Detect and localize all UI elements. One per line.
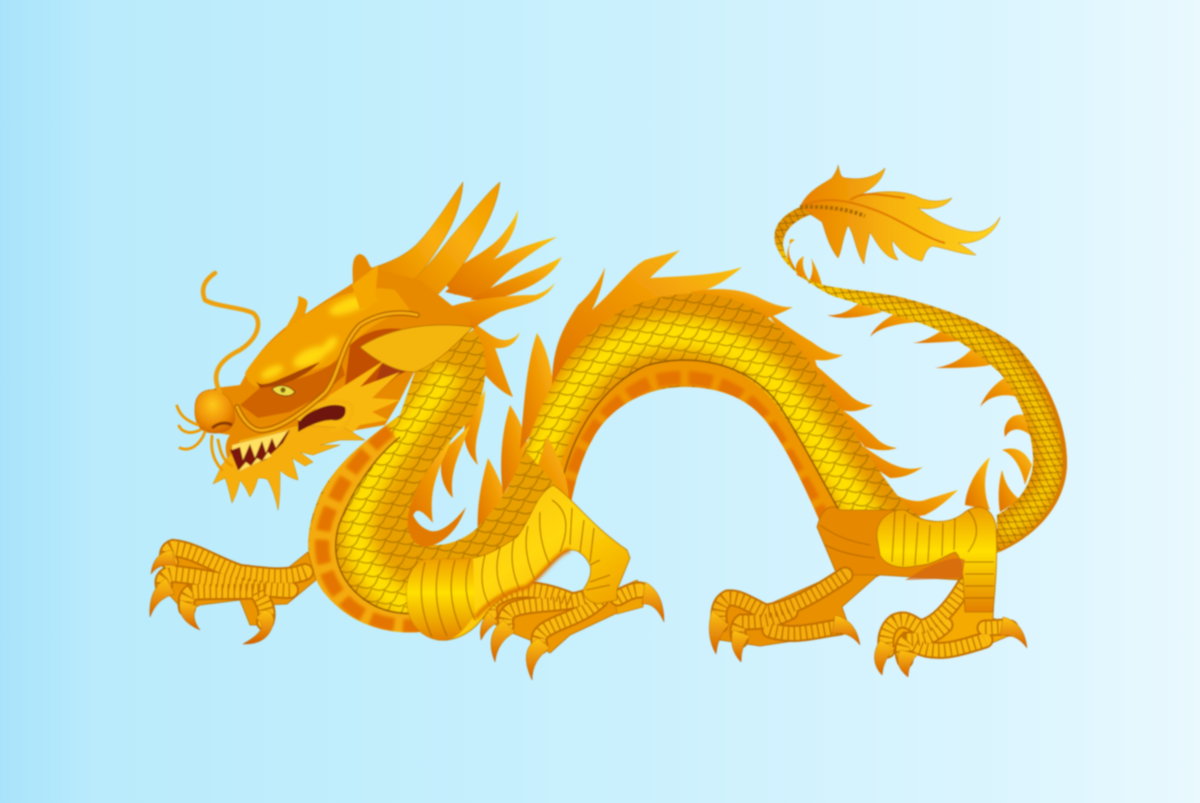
ribbed thigh [407, 485, 630, 640]
face shadow [240, 358, 345, 418]
neck [307, 329, 486, 634]
hind legs [709, 507, 1027, 677]
tail plume [800, 165, 1000, 264]
teeth [232, 430, 290, 472]
tail fins [787, 239, 1035, 512]
flame over body behind thigh [522, 435, 569, 515]
belly bands [560, 358, 839, 520]
eye [272, 386, 295, 396]
dragon [150, 165, 1080, 680]
neck belly bands [322, 430, 425, 626]
head base [195, 254, 470, 472]
snout highlights [259, 291, 373, 382]
hind-right claws [874, 617, 1027, 677]
claws [480, 582, 664, 680]
long whisker [203, 273, 258, 392]
lower coil behind the thigh [405, 450, 560, 600]
thigh shadow [475, 550, 570, 618]
mouth [230, 430, 290, 470]
right toe [614, 580, 645, 614]
palm [480, 590, 617, 653]
nose [195, 390, 235, 433]
neck mane flames [405, 322, 520, 547]
nose whiskers [177, 406, 232, 470]
upper hip [877, 507, 997, 612]
head top highlight [245, 288, 410, 387]
lip ridge [237, 313, 417, 430]
cheek mouth slit [298, 405, 346, 432]
head mane [420, 210, 562, 328]
crest [352, 265, 380, 310]
small brow flames [285, 296, 308, 330]
hind-right leg and palm [880, 530, 1018, 657]
hind-left leg and palm [720, 575, 878, 646]
arched body [524, 293, 922, 520]
lower hip [817, 507, 990, 590]
hind-left claws [709, 610, 860, 662]
cheek fan [300, 360, 400, 435]
lower jaw and beard [213, 425, 365, 510]
head [177, 254, 473, 510]
tail [773, 206, 1068, 554]
ear [360, 325, 473, 372]
middle leg and thigh [407, 485, 664, 680]
forearm and palm [165, 548, 316, 625]
front leg and paw [150, 548, 316, 644]
horns [372, 182, 500, 310]
brow [255, 362, 320, 388]
dorsal fins [478, 250, 958, 535]
claws [150, 550, 274, 644]
